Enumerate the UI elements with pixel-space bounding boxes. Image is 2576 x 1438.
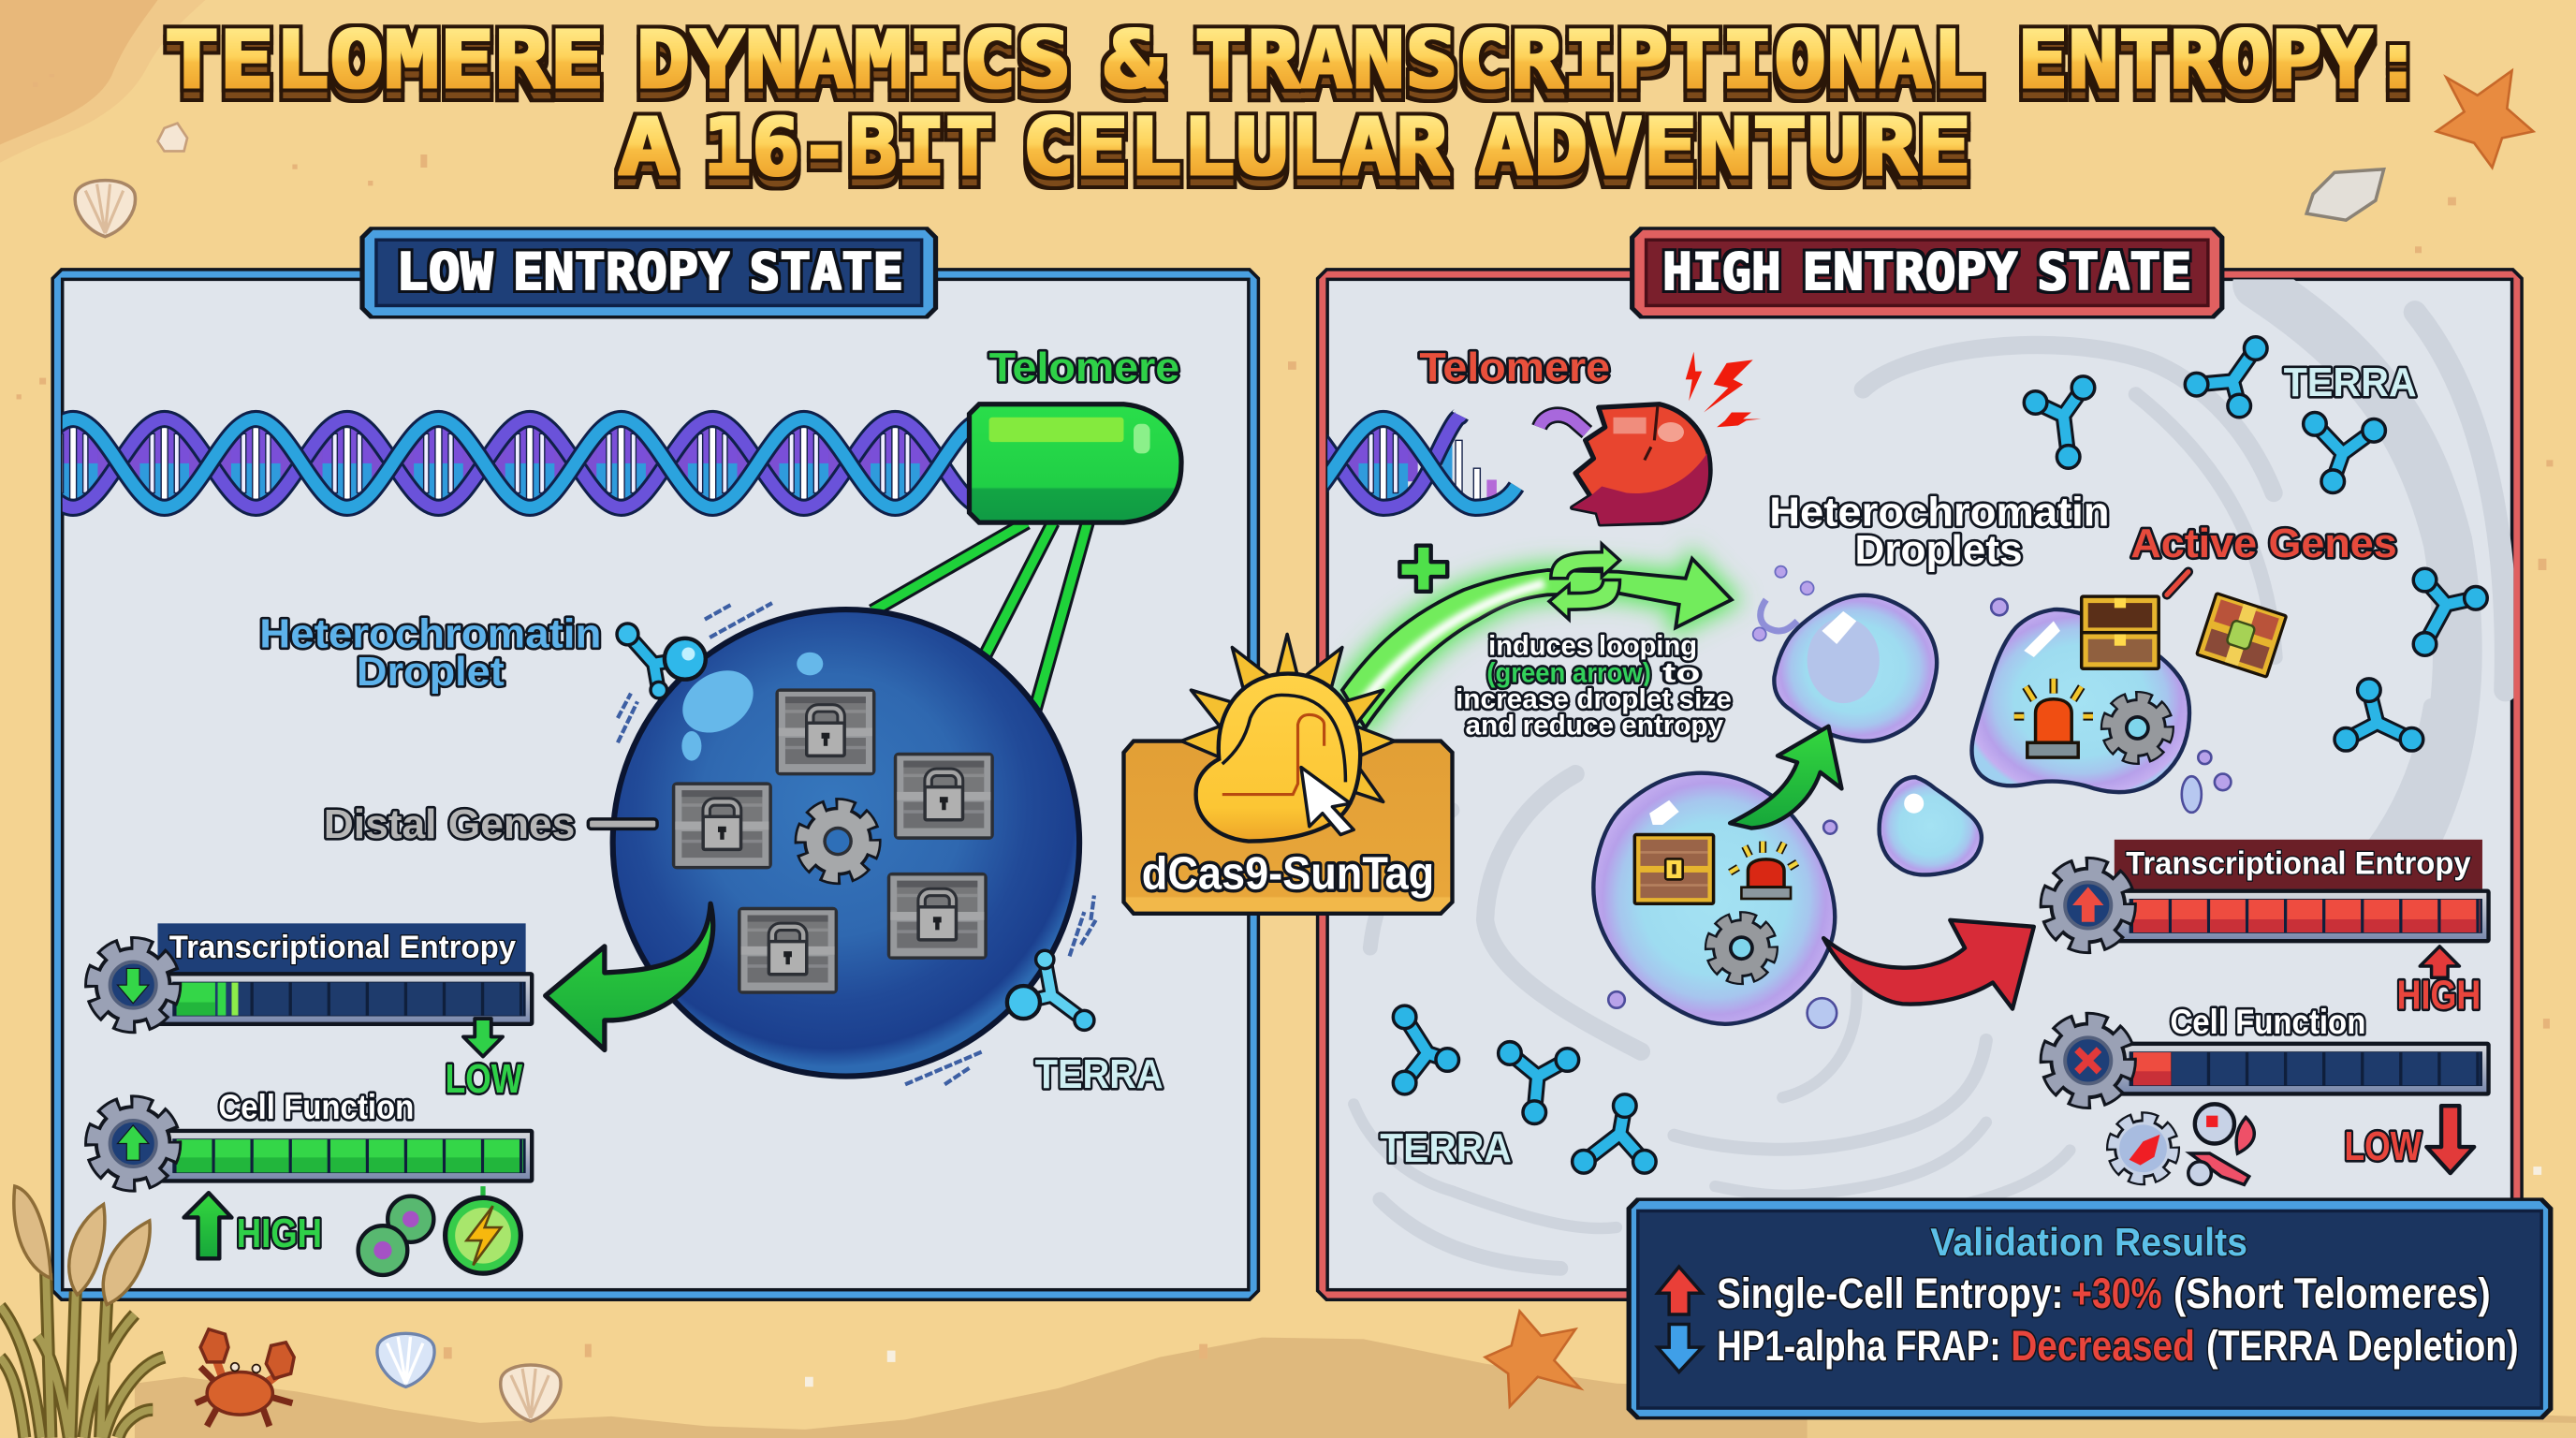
annotation: induces looping: increase droplet size xyxy=(1456,683,1732,714)
icon: energy bolt xyxy=(446,1186,520,1273)
closed chest xyxy=(1633,833,1715,905)
cursor xyxy=(1301,768,1354,835)
label: telomere: Telomere xyxy=(1419,345,1610,390)
siren xyxy=(2014,679,2093,757)
gear xyxy=(1712,918,1771,977)
title: CELLULAR xyxy=(1022,101,1449,193)
red arrow: entropy increases xyxy=(1823,920,2034,1009)
panel: low entropy state xyxy=(0,227,1260,1301)
header: low entropy state: ENTROPY xyxy=(513,242,730,301)
label: telomere: Telomere xyxy=(989,345,1179,390)
header: high entropy state: ENTROPY xyxy=(1802,242,2018,301)
label: TERRA upper: TERRA xyxy=(2284,360,2417,405)
title: ENTROPY: xyxy=(2017,14,2423,106)
header: high entropy state: HIGH xyxy=(1662,242,1781,301)
header: low entropy state xyxy=(359,227,938,318)
header: high entropy state: STATE xyxy=(2037,242,2191,301)
label and molecule: TERRA: TERRA xyxy=(1035,1051,1164,1097)
status bar: cell function low: Cell Function xyxy=(2170,1003,2365,1041)
status bar: cell function high: Cell Function xyxy=(218,1088,414,1126)
DNA helix xyxy=(0,419,987,507)
label: active genes xyxy=(2130,521,2397,594)
result: HP1-alpha FRAP: (TERRA Depletion) xyxy=(2206,1322,2519,1370)
tiny bubbles xyxy=(1608,599,2231,1028)
tethers xyxy=(872,522,1088,710)
annotation: induces looping: induces looping xyxy=(1488,630,1697,661)
decoration: crab xyxy=(196,1329,294,1426)
iridescent droplet: small center xyxy=(1880,777,1982,874)
panel frame xyxy=(51,268,1260,1301)
title: 16-BIT xyxy=(703,101,994,193)
gear xyxy=(2108,698,2167,757)
TERRA molecule on droplet xyxy=(617,624,706,698)
green looping arrow xyxy=(1342,544,1732,727)
label: heterochromatin droplet: Heterochromatin xyxy=(259,610,601,656)
wheat heads xyxy=(14,1186,150,1304)
green arrow: entropy decreases xyxy=(546,903,713,1049)
icon: scallop shell top left xyxy=(75,181,135,237)
LOW indicator: LOW xyxy=(2345,1123,2422,1169)
label: active genes: Active Genes xyxy=(2130,521,2397,566)
panel: high entropy state xyxy=(1292,227,2524,1301)
decoration: starfish bottom xyxy=(1486,1312,1580,1406)
free TERRA molecules xyxy=(1393,337,2487,1173)
panel frame xyxy=(1316,268,2524,1301)
result: single-cell entropy: Single-Cell Entropy: xyxy=(1717,1269,2063,1317)
plus sign xyxy=(1399,546,1447,592)
background swirl xyxy=(1354,285,2506,1269)
decoration: cream shell xyxy=(501,1365,561,1421)
central gear xyxy=(803,807,872,875)
result: single-cell entropy: (Short Telomeres) xyxy=(2174,1269,2491,1317)
gray locked chests xyxy=(672,688,994,994)
decoration: sea grass xyxy=(0,1186,165,1438)
title xyxy=(165,14,2423,193)
icon: broken fragments xyxy=(2188,1104,2254,1184)
icon: starfish top right xyxy=(2437,70,2533,168)
result: HP1-alpha FRAP: HP1-alpha FRAP: xyxy=(1717,1322,2001,1370)
annotation: induces looping: to xyxy=(1662,657,1701,688)
HIGH indicator xyxy=(184,1193,322,1258)
annotation: induces looping xyxy=(1456,630,1732,741)
dCas9-SunTag box xyxy=(1123,634,1453,914)
HIGH indicator xyxy=(2397,946,2481,1019)
result: single-cell entropy xyxy=(1658,1267,2491,1317)
status bar: cell function low xyxy=(2049,1003,2491,1099)
icon: conch shell xyxy=(2306,169,2384,220)
open chest xyxy=(2080,594,2160,670)
tilted open-lock chest xyxy=(2195,592,2289,679)
title: A xyxy=(618,101,677,193)
header: low entropy state: LOW xyxy=(396,242,493,301)
annotation: induces looping: (green arrow) xyxy=(1486,657,1651,688)
icon: dividing healthy cells xyxy=(359,1196,433,1275)
icon: damage sparks xyxy=(1686,352,1761,427)
label: heterochromatin droplets: Droplets xyxy=(1855,527,2023,573)
title: TRANSCRIPTIONAL xyxy=(1194,14,1984,106)
motion dashes xyxy=(618,603,1096,1084)
label: dCas9-SunTag xyxy=(1142,848,1434,899)
status bar: cell function high xyxy=(95,1088,534,1183)
iridescent droplet: large with chest xyxy=(1593,773,1835,1024)
annotation: induces looping: and reduce entropy xyxy=(1466,710,1723,741)
iridescent droplet: top right with active gene xyxy=(1971,594,2189,792)
result: HP1-alpha FRAP xyxy=(1658,1322,2519,1372)
green telomere cap xyxy=(970,404,1181,522)
status bar: transcriptional entropy high: Transcriptional Entropy xyxy=(2126,846,2471,882)
status bar: transcriptional entropy low: Transcriptional Entropy xyxy=(169,930,516,965)
LOW indicator xyxy=(446,1019,523,1102)
title: TELOMERE xyxy=(165,14,605,106)
sun rays xyxy=(1181,634,1395,801)
label: TERRA lower: TERRA xyxy=(1380,1125,1512,1171)
loop symbol xyxy=(1549,544,1620,620)
status bar: transcriptional entropy high xyxy=(2049,840,2491,944)
icon: pebble xyxy=(157,124,187,151)
label: heterochromatin droplets xyxy=(1769,490,2110,573)
sun bell body xyxy=(1196,674,1360,842)
heading: Validation Results xyxy=(1930,1220,2247,1264)
iridescent droplet: top center xyxy=(1753,566,1937,741)
label: heterochromatin droplet: Droplet xyxy=(357,649,505,695)
result: single-cell entropy: +30% xyxy=(2071,1269,2162,1317)
header: low entropy state: STATE xyxy=(749,242,903,301)
label and molecule: TERRA xyxy=(1007,950,1164,1097)
label: distal genes: Distal Genes xyxy=(324,801,575,847)
label: heterochromatin droplet xyxy=(259,610,601,695)
short frayed DNA xyxy=(1292,416,1516,507)
blue heterochromatin droplet xyxy=(613,609,1079,1077)
panel: validation results xyxy=(1627,1197,2553,1419)
title: DYNAMICS xyxy=(636,14,1071,106)
status bar: transcriptional entropy low xyxy=(95,923,534,1026)
header: high entropy state xyxy=(1630,227,2224,318)
title: ADVENTURE xyxy=(1479,101,1971,193)
LOW indicator: LOW xyxy=(446,1056,523,1102)
title: & xyxy=(1104,14,1164,106)
label: heterochromatin droplets: Heterochromatin xyxy=(1769,490,2110,536)
green arrow: droplets merge xyxy=(1730,726,1841,829)
LOW indicator xyxy=(2345,1106,2474,1173)
icon: damaged cell xyxy=(2114,1119,2173,1178)
HIGH indicator: HIGH xyxy=(2397,973,2481,1019)
siren xyxy=(1730,842,1797,899)
result: HP1-alpha FRAP: Decreased xyxy=(2011,1322,2195,1370)
HIGH indicator: HIGH xyxy=(237,1211,322,1256)
decoration: blue shell xyxy=(377,1333,434,1387)
broken red telomere cap xyxy=(1540,404,1710,524)
